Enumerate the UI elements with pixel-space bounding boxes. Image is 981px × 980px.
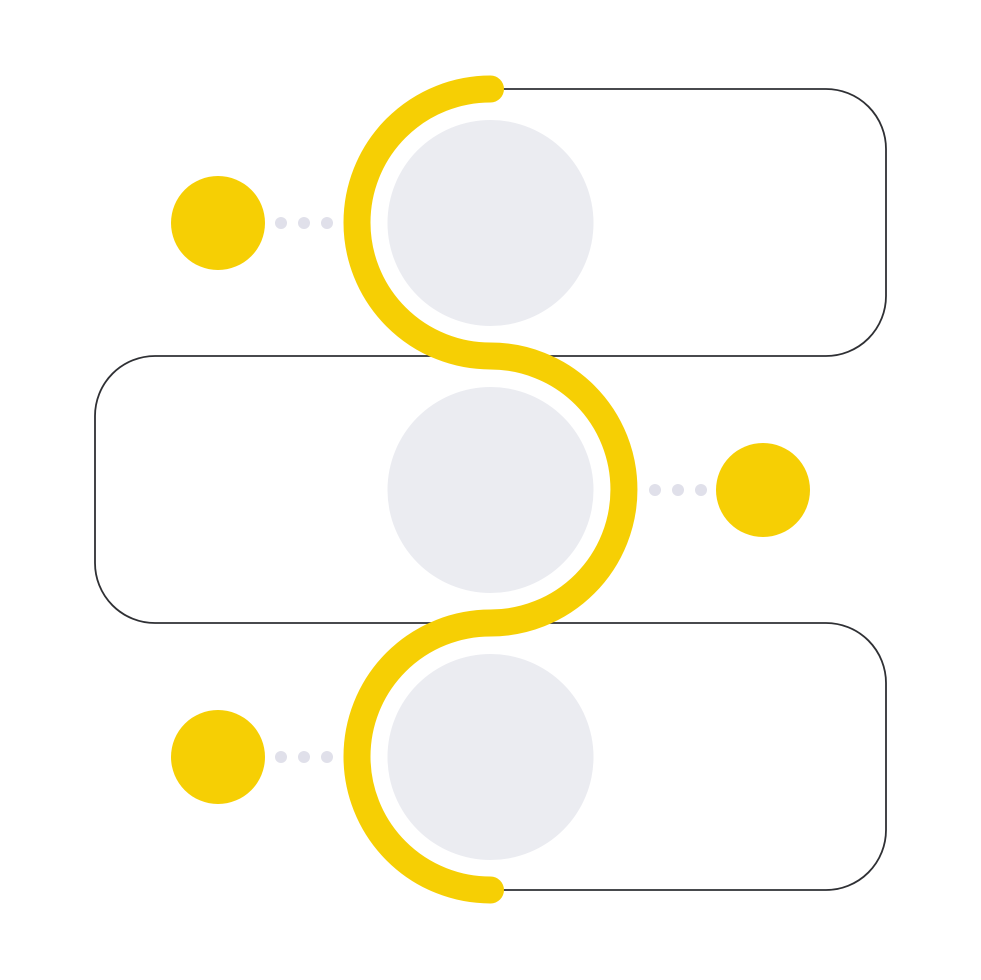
circle: bottom placeholder [388,654,594,860]
serpentine yellow ribbon [357,89,624,890]
connector: middle dots [649,484,707,496]
panel: middle outlined box [95,356,490,623]
icon: bottom left yellow dot [171,710,265,804]
circle: middle placeholder [388,387,594,593]
panel: bottom outlined box [490,623,886,890]
panel: top outlined box [490,89,886,356]
connector: bottom dots [275,751,333,763]
circle: top placeholder [388,120,594,326]
icon: middle right yellow dot [716,443,810,537]
icon: top left yellow dot [171,176,265,270]
connector: top dots [275,217,333,229]
